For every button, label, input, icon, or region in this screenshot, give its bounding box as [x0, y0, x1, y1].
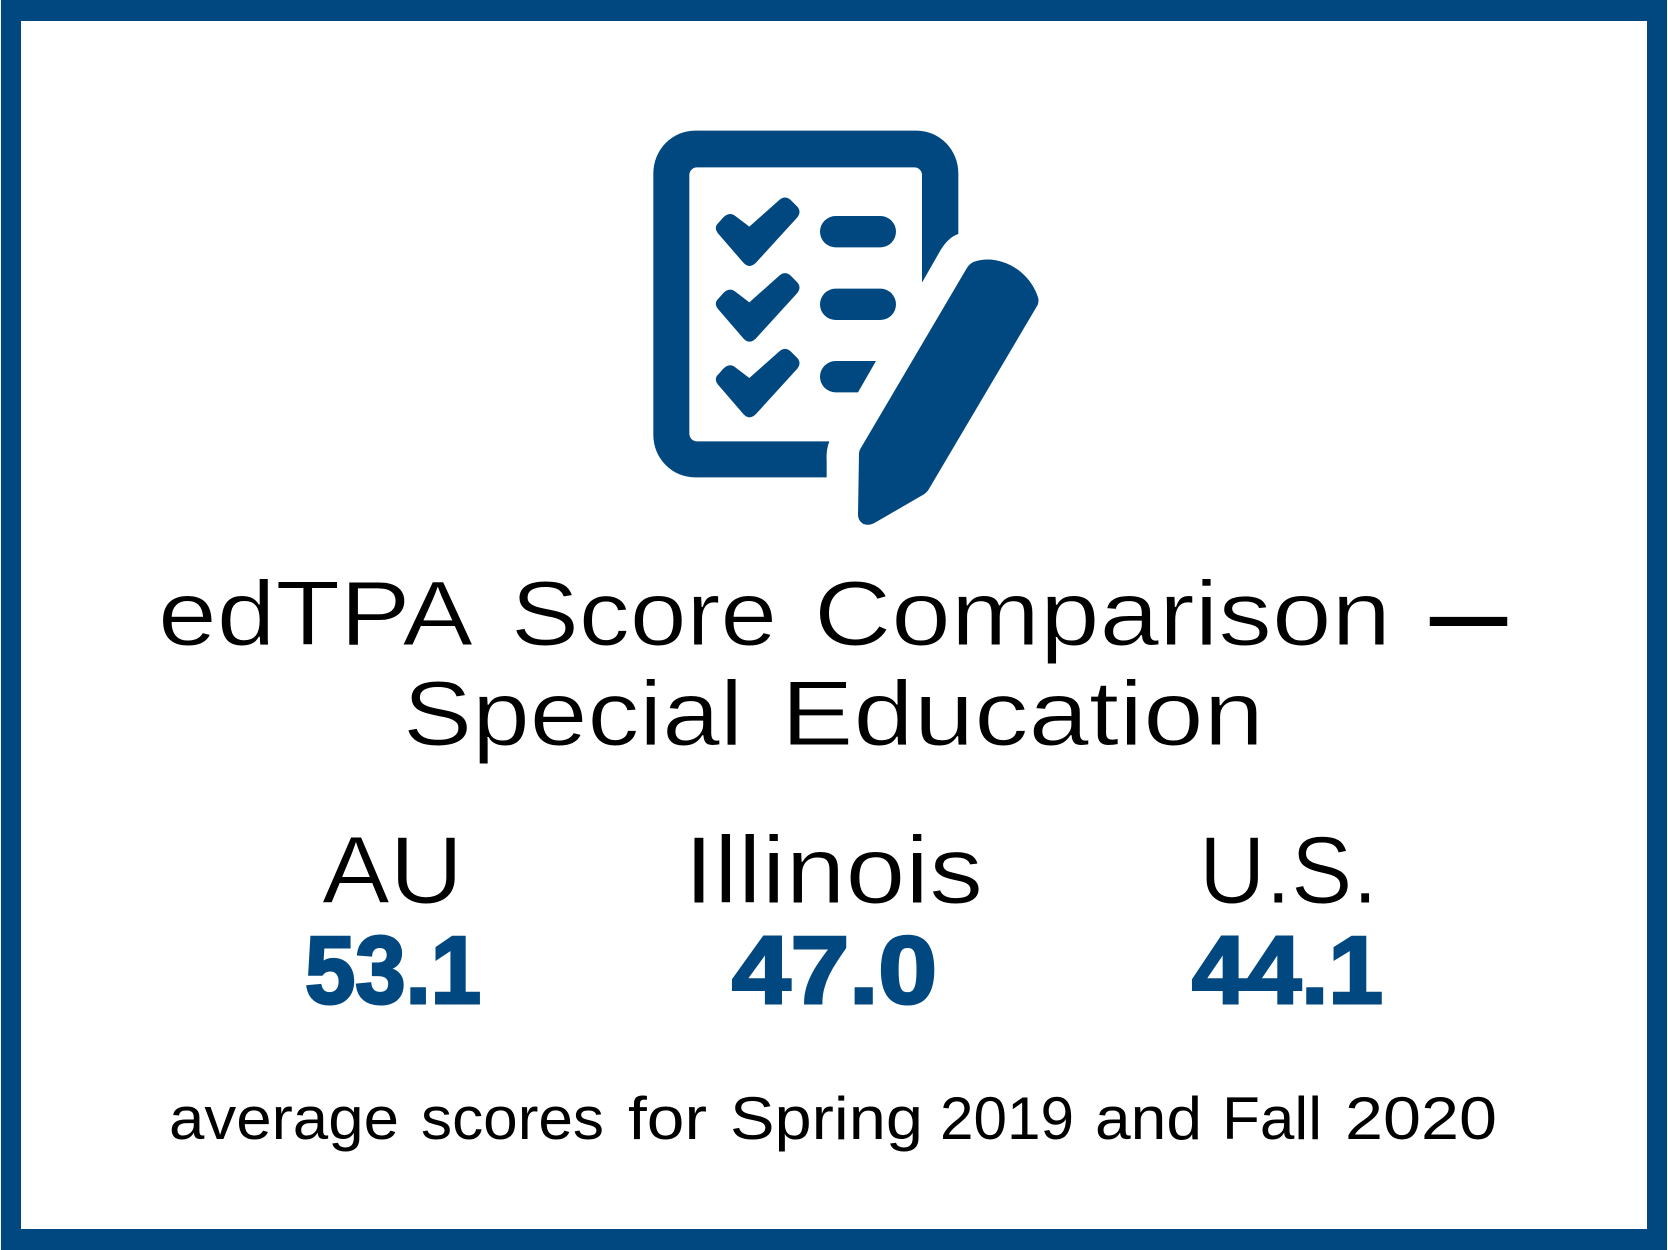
value: 53.1: 53.1: [305, 917, 481, 1024]
label: AU: AU: [322, 817, 463, 924]
footnote: Fall: [1222, 1085, 1322, 1152]
icon: check mark 2: [716, 273, 799, 342]
footnote: 2019: [940, 1085, 1074, 1152]
icon: list line 2: [820, 289, 896, 320]
title line 1: [158, 563, 1506, 665]
title: [158, 563, 1506, 765]
column: U.S.: [1192, 817, 1383, 1024]
column: Illinois: [684, 817, 983, 1024]
icon: check mark 3: [716, 349, 799, 417]
icon: checklist with pencil: [653, 131, 1038, 525]
value: 47.0: 47.0: [732, 917, 937, 1024]
footnote: Spring: [730, 1085, 923, 1152]
footnote: scores: [421, 1085, 604, 1152]
label: U.S.: U.S.: [1199, 817, 1378, 924]
icon: check mark 1: [716, 197, 799, 266]
icon: list line 1: [820, 216, 896, 247]
title line 1: edTPA: [158, 563, 474, 665]
title line 2: [403, 663, 1264, 765]
footnote: 2020: [1345, 1085, 1497, 1152]
title line 1: —: [1431, 563, 1506, 665]
value: 44.1: 44.1: [1192, 917, 1383, 1024]
column: AU: [305, 817, 481, 1024]
title line 2: Education: [781, 663, 1264, 765]
icon: pencil: [858, 260, 1038, 525]
icon: list line 3: [820, 361, 876, 392]
icon: clipboard outline: [653, 131, 958, 477]
footnote: and: [1095, 1085, 1202, 1152]
title line 1: Comparison: [814, 563, 1391, 665]
footnote: for: [628, 1085, 707, 1152]
label: Illinois: Illinois: [684, 817, 983, 924]
title line 1: Score: [511, 563, 777, 665]
footnote: average: [169, 1085, 399, 1152]
title line 2: Special: [403, 663, 743, 765]
footnote: [169, 1085, 1497, 1152]
